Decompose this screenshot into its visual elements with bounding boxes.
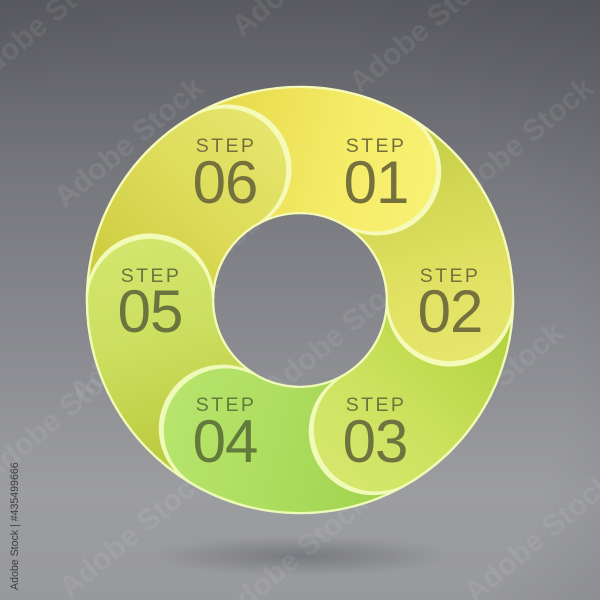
watermarks: Adobe Stock [188, 136, 350, 279]
watermarks: Adobe Stock [63, 266, 225, 409]
label: step 06: STEP [196, 135, 256, 157]
panel: step 04 [135, 304, 437, 579]
label: step 04: 04 [193, 408, 257, 475]
stock id caption: Adobe Stock | #435499666 [9, 462, 21, 590]
panel: step 05 [83, 232, 258, 485]
label: step 06: 06 [193, 149, 257, 216]
panel: step 03 [265, 248, 566, 518]
label: step 05: STEP [121, 265, 181, 287]
panel: step 02 [342, 115, 517, 368]
label: step 03: STEP [346, 394, 406, 416]
label: step 05: 05 [118, 278, 182, 345]
label: step 01: STEP [346, 135, 406, 157]
label: step 03: 03 [343, 408, 407, 475]
panel: step 06 [34, 82, 335, 352]
label: step 01: 01 [344, 149, 408, 216]
watermarks: Adobe Stock [48, 71, 210, 214]
watermarks: Adobe Stock [258, 261, 420, 404]
label: step 02: STEP [420, 265, 480, 287]
label: step 02: 02 [418, 278, 482, 345]
panel: step 01 [163, 21, 465, 296]
watermarks: Adobe Stock [53, 461, 215, 600]
label: step 04: STEP [196, 394, 256, 416]
ground shadow [150, 536, 450, 576]
watermarks: Adobe Stock [408, 316, 570, 459]
watermarks: Adobe Stock [438, 71, 600, 214]
